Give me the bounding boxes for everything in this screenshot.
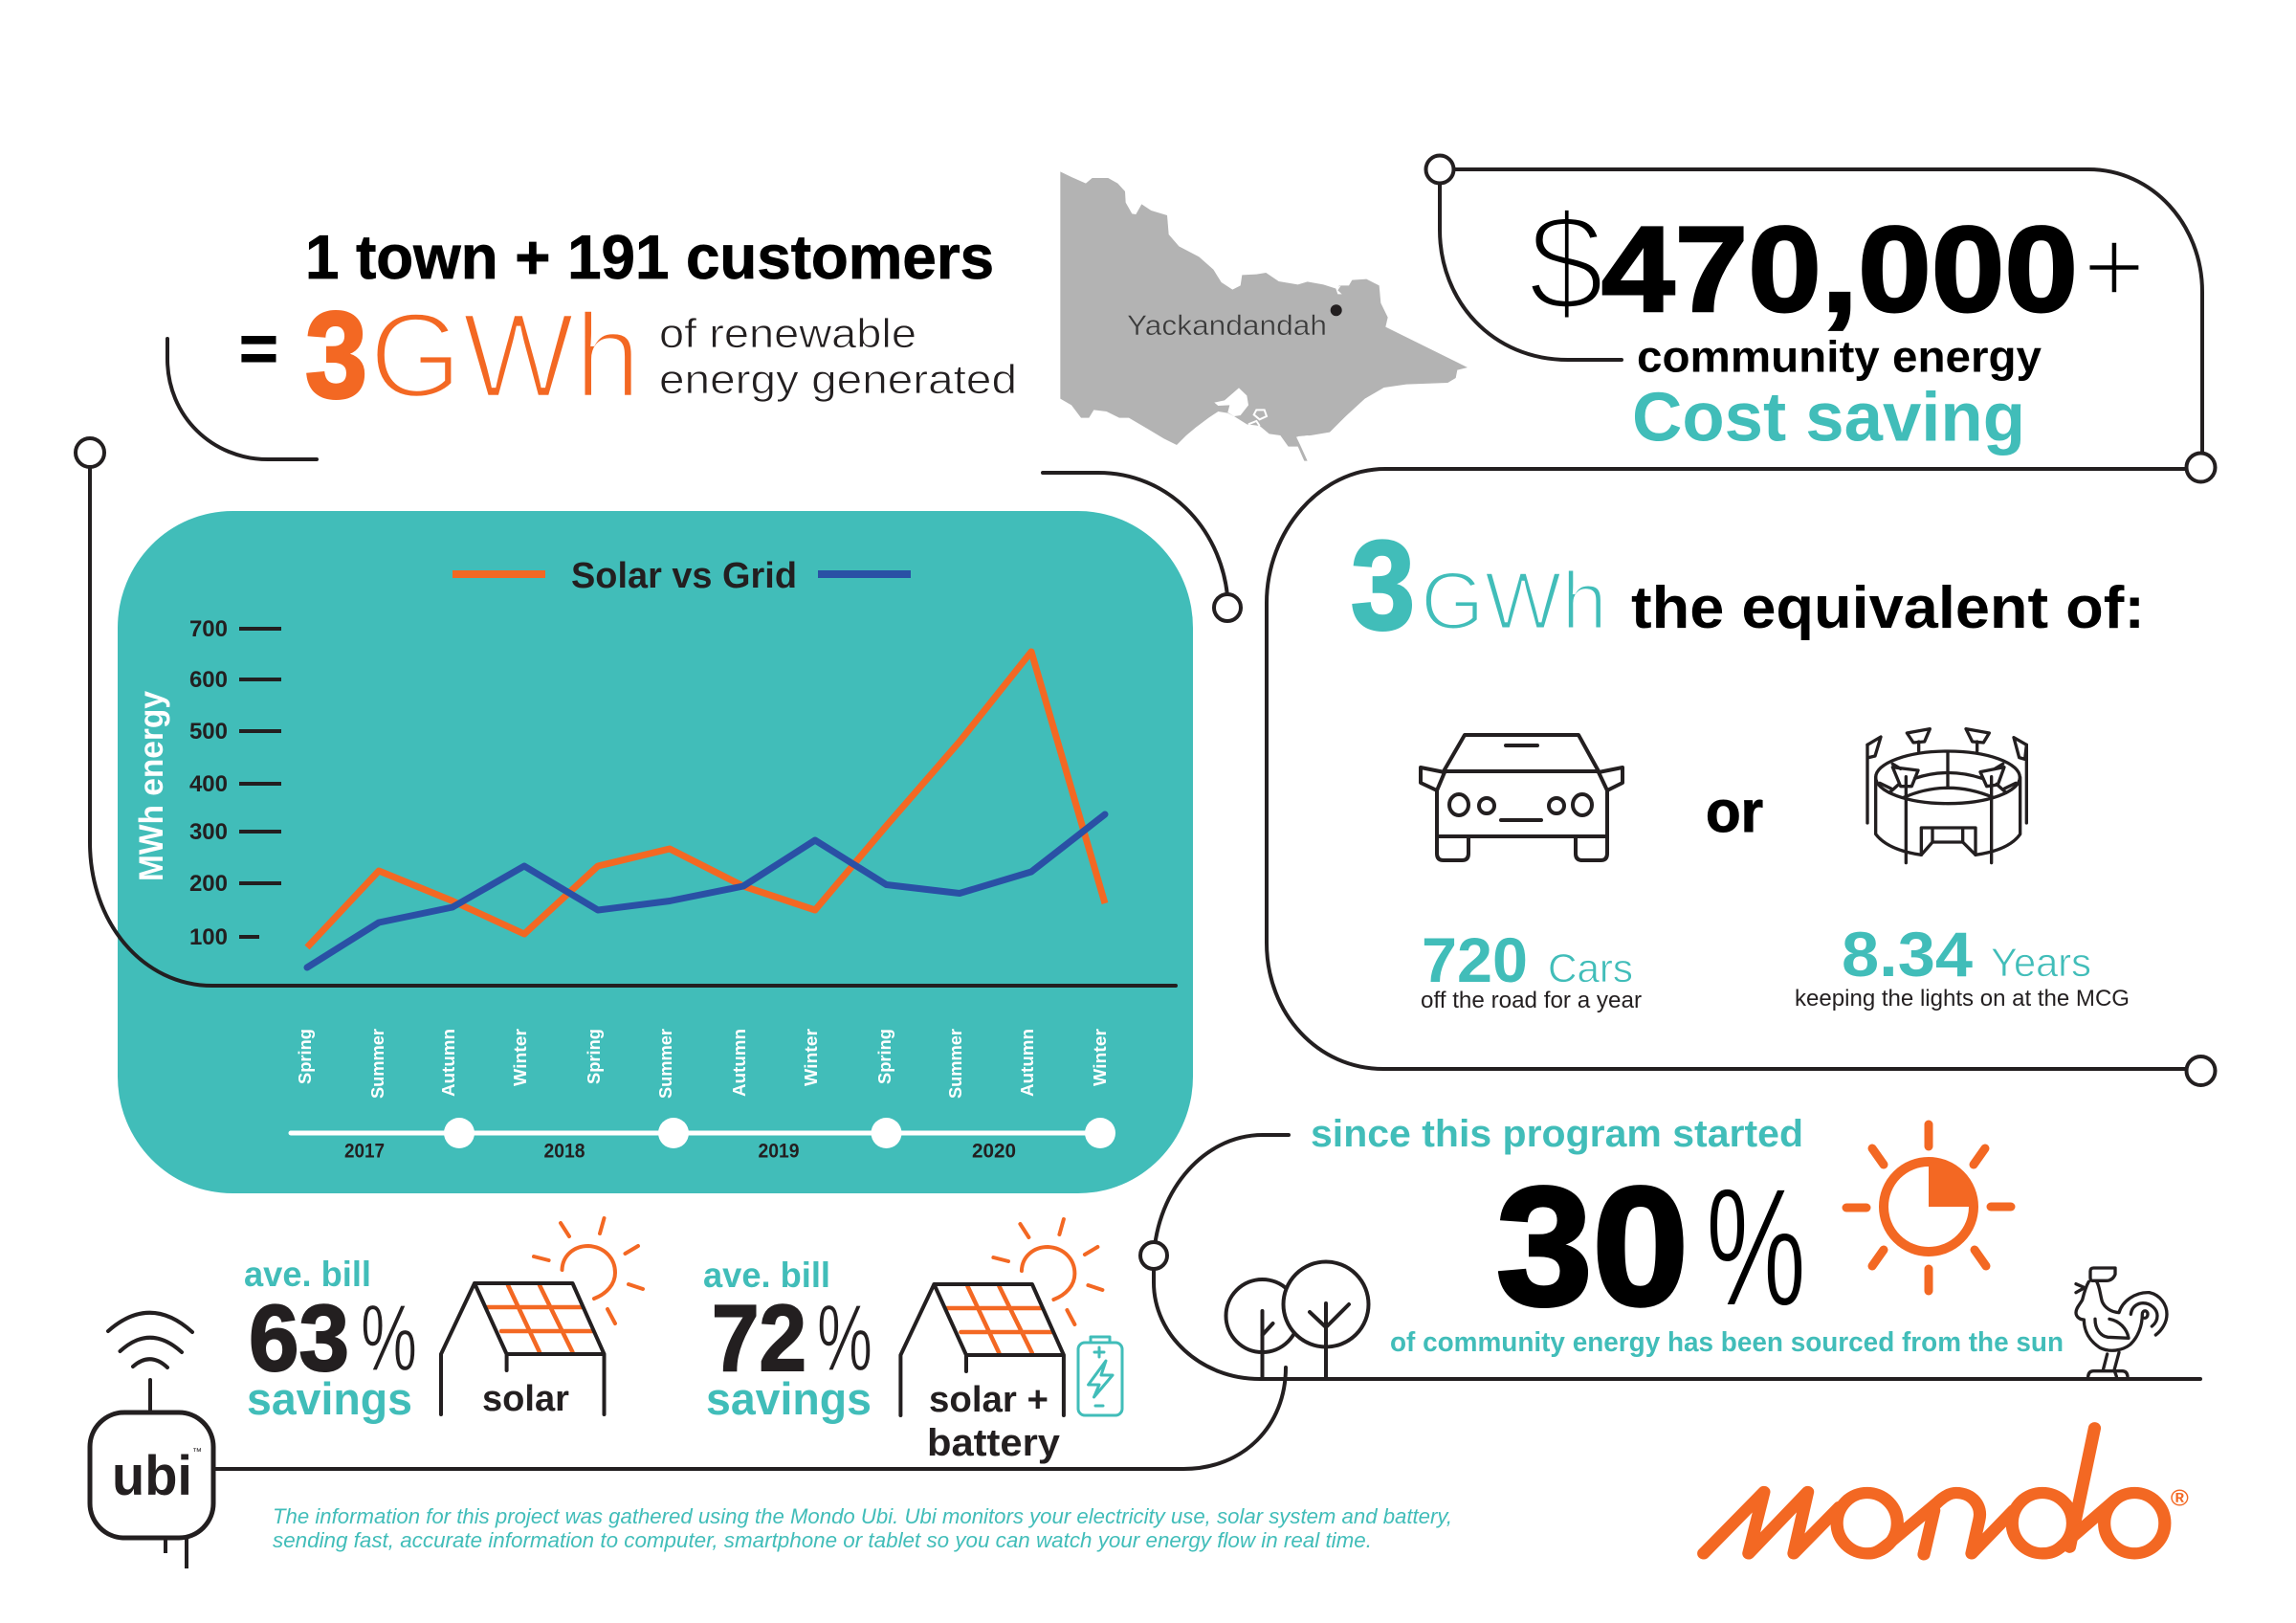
stat: $470,000+ community energy cost saving: $ <box>1528 186 1604 340</box>
x axis season labels: Summer <box>368 1029 387 1099</box>
map: Victoria with Yackandandah <box>1060 171 1468 461</box>
year timeline <box>291 1118 1115 1162</box>
stat: 720 cars: off the road for a year <box>1421 988 1642 1013</box>
title: 1 town + 191 customers: 1 town + 191 customers <box>305 222 994 292</box>
panel: cost saving outline <box>1425 155 2202 454</box>
heading: 3GWh the equivalent of: 3 <box>1351 515 1415 656</box>
stat: solar plus battery savings 72%: % <box>817 1285 872 1390</box>
headline: = 3GWh of renewable energy generated: 3 <box>305 287 367 424</box>
chart legend: Solar vs Grid <box>571 556 797 596</box>
stat: solar savings 63%: savings <box>247 1373 412 1424</box>
icon: house with solar panels and battery: battery <box>927 1422 1061 1464</box>
stat: $470,000+ community energy cost saving <box>1528 186 2146 456</box>
heading: 3GWh the equivalent of <box>1351 515 2145 656</box>
x axis season labels: Winter <box>511 1029 530 1086</box>
stat: $470,000+ community energy cost saving: 470,000 <box>1601 201 2078 337</box>
headline: = 3GWh of renewable energy generated: = <box>239 311 278 386</box>
logo: mondo: ® <box>2171 1485 2189 1511</box>
icon: house with solar panels: solar <box>482 1379 569 1419</box>
stat: 30% <box>1496 1153 1806 1342</box>
year timeline: 2019 <box>758 1141 800 1162</box>
text: or: or <box>1706 779 1763 844</box>
grid data line <box>307 814 1105 967</box>
stat: solar plus battery savings 72%: ave. bill <box>703 1256 830 1295</box>
y axis ticks and labels: 500 <box>189 719 228 745</box>
heading: 3GWh the equivalent of: GWh <box>1421 556 1607 647</box>
stat: $470,000+ community energy cost saving: + <box>2083 207 2146 326</box>
connector line: ubi to ground <box>215 1367 1286 1469</box>
stat: 720 cars <box>1421 924 1642 1013</box>
year timeline: 2018 <box>543 1141 585 1162</box>
footnote text <box>273 1504 1452 1552</box>
footnote text: The information for this project was gathered using the Mondo Ubi. Ubi monitors your electricity use, solar system and battery, <box>273 1504 1452 1528</box>
y axis ticks and labels: 200 <box>189 871 228 897</box>
stat: solar plus battery savings 72%: 72 <box>712 1285 806 1390</box>
icon: sun arc <box>993 1219 1102 1324</box>
headline: = 3GWh of renewable energy generated: of renewable <box>659 311 916 357</box>
icon: ubi device <box>90 1313 213 1568</box>
x axis season labels <box>296 1029 1110 1099</box>
text: since this program started: since this program started <box>1311 1113 1803 1155</box>
icon: ubi device: ™ <box>192 1447 202 1457</box>
logo: mondo <box>1704 1428 2189 1554</box>
y axis ticks and labels: 600 <box>189 667 228 693</box>
stat: $470,000+ community energy cost saving: Cost saving <box>1632 379 2025 456</box>
x axis season labels: Spring <box>296 1029 315 1084</box>
y axis ticks and labels: 300 <box>189 819 228 845</box>
map: Victoria with Yackandandah: Yackandandah <box>1127 310 1327 342</box>
x axis season labels: Spring <box>585 1029 604 1084</box>
solar data line <box>307 652 1105 947</box>
icon: sun with quarter wedge <box>1846 1124 2011 1291</box>
icon: ubi device: ubi <box>112 1445 192 1507</box>
panel: solar vs grid chart <box>118 511 1193 1193</box>
stat: 8.34 years <box>1795 919 2130 1012</box>
stat: 8.34 years: 8.34 <box>1842 919 1973 989</box>
stat: 30%: % <box>1706 1154 1806 1342</box>
stat: solar plus battery savings 72%: savings <box>706 1373 872 1424</box>
stat: 30%: 30 <box>1496 1153 1689 1341</box>
icon: wifi signal <box>108 1313 192 1410</box>
stat: 8.34 years: Years <box>1991 940 2091 985</box>
icon: house with solar panels and battery: solar + <box>929 1380 1049 1420</box>
icon: battery <box>1078 1337 1122 1415</box>
y axis ticks and labels <box>189 616 281 950</box>
footnote text: sending fast, accurate information to computer, smartphone or tablet so you can watch your energy flow in real time. <box>273 1528 1372 1552</box>
panel: equivalents outline <box>1267 454 2216 1085</box>
y axis title: MWh energy <box>133 690 170 881</box>
text: of community energy has been sourced from the sun: of community energy has been sourced from the sun <box>1390 1327 2064 1358</box>
stat: solar savings 63%: 63 <box>249 1285 349 1390</box>
y axis ticks and labels: 100 <box>189 924 228 950</box>
icon: house with solar panels and battery <box>900 1219 1122 1464</box>
headline: = 3GWh of renewable energy generated <box>239 287 1017 424</box>
x axis season labels: Winter <box>1091 1029 1110 1086</box>
stat: solar plus battery savings 72% <box>703 1256 872 1424</box>
icon: trees <box>1226 1261 1368 1379</box>
stat: solar savings 63%: ave. bill <box>244 1255 371 1294</box>
stat: $470,000+ community energy cost saving: community energy <box>1637 331 2042 381</box>
icon: house with solar panels <box>441 1218 643 1419</box>
stat: 720 cars: 720 <box>1422 924 1528 995</box>
year timeline: 2020 <box>972 1141 1016 1162</box>
stat: solar savings 63%: % <box>361 1285 417 1390</box>
headline: = 3GWh of renewable energy generated: energy generated <box>659 357 1017 403</box>
x axis season labels: Autumn <box>439 1029 458 1097</box>
connector line: chart axis <box>76 438 1176 986</box>
icon: stadium <box>1867 729 2026 863</box>
x axis season labels: Summer <box>946 1029 965 1099</box>
headline: = 3GWh of renewable energy generated: GWh <box>369 288 641 423</box>
y axis ticks and labels: 700 <box>189 616 228 642</box>
x axis season labels: Autumn <box>1018 1029 1037 1097</box>
icon: rooster <box>2076 1268 2167 1376</box>
x axis season labels: Summer <box>656 1029 675 1099</box>
heading: 3GWh the equivalent of: the equivalent of: <box>1631 575 2145 641</box>
icon: car <box>1421 735 1623 860</box>
icon: sun arc <box>534 1218 643 1323</box>
stat: solar savings 63% <box>244 1255 417 1424</box>
stat: 8.34 years: keeping the lights on at the MCG <box>1795 986 2130 1012</box>
y axis ticks and labels: 400 <box>189 771 228 797</box>
connector line: map to chart <box>1043 473 1241 621</box>
connector line: since program started to ground <box>1140 1135 2200 1379</box>
stat: 720 cars: Cars <box>1548 945 1633 990</box>
x axis season labels: Autumn <box>730 1029 749 1097</box>
x axis season labels: Winter <box>802 1029 821 1086</box>
connector line: title bracket <box>167 339 317 459</box>
year timeline: 2017 <box>344 1141 385 1162</box>
x axis season labels: Spring <box>875 1029 894 1084</box>
